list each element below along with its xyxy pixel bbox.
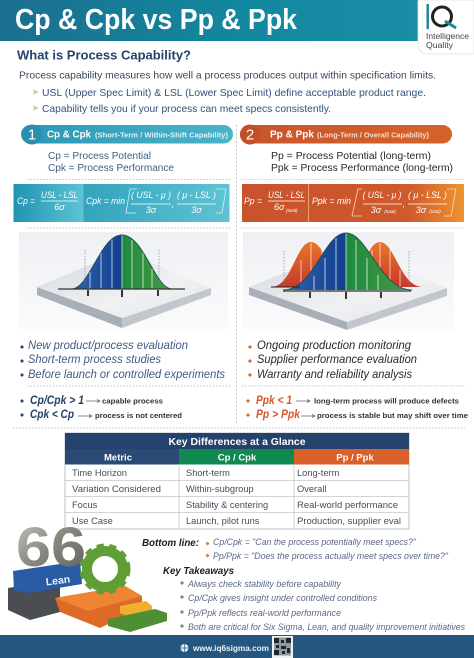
table: key differences: Cp / Cpk	[218, 452, 257, 464]
use cases: Pp and Ppk	[248, 338, 417, 381]
formula bar: Pp and Ppk: 3σ	[371, 205, 382, 215]
panel header 1: Cp & Cpk: Cp & Cpk	[47, 130, 91, 140]
bottom line	[142, 537, 449, 561]
interpretation rules: Cp and Cpk: Cpk < Cp	[30, 409, 74, 421]
table: key differences: Time Horizon	[72, 468, 127, 478]
icon: globe	[180, 644, 188, 652]
heading: What is Process Capability?: What is Process Capability?	[17, 48, 191, 62]
definitions: Cp and Cpk: Cp = Process Potential	[48, 151, 151, 162]
definitions: Pp and Ppk: Ppk = Process Performance (long-term)	[271, 163, 453, 174]
table: key differences: Use Case	[72, 516, 113, 526]
use cases: Cp and Cpk: Before launch or controlled experiments	[28, 367, 225, 381]
illustration: six sigma and lean blocks: Lean	[45, 574, 71, 588]
intro text: Process capability measures how well a process produces output within specification limits.	[19, 70, 436, 82]
illustration: six sigma and lean blocks	[8, 515, 167, 632]
table: key differences: Real-world performance	[297, 500, 398, 510]
formula bar: Pp and Ppk: (total)	[384, 209, 396, 214]
panel header 2: Pp & Ppk	[240, 124, 452, 144]
formula bar: Cp and Cpk: ( μ - LSL )	[177, 190, 216, 200]
formula bar: Cp and Cpk: 3σ	[146, 205, 157, 215]
illustration: six sigma and lean blocks: 66	[16, 515, 86, 578]
interpretation rules: Pp and Ppk: long-term process will produce defects	[314, 396, 459, 406]
table: key differences: Short-term	[186, 468, 230, 478]
interpretation rules: Cp and Cpk: process is not centered	[95, 411, 182, 420]
logo: IQ Intelligence Quality	[418, 0, 474, 54]
panel header 1: Cp & Cpk: (Short-Term / Within-Shift Capability)	[95, 130, 229, 140]
center divider	[236, 125, 238, 425]
formula bar: Pp and Ppk	[242, 184, 464, 222]
table: key differences: Metric	[104, 452, 132, 464]
key takeaways: Both are critical for Six Sigma, Lean, and quality improvement initiatives	[188, 622, 465, 632]
table: key differences: Variation Considered	[72, 484, 161, 494]
formula bar: Pp and Ppk: ( μ - LSL )	[408, 190, 447, 200]
key takeaways: Always check stability before capability	[187, 579, 341, 589]
formula bar: Pp and Ppk: Pp =	[244, 196, 262, 207]
key takeaways: Key Takeaways	[163, 565, 234, 577]
formula bar: Pp and Ppk: 3σ	[416, 205, 427, 215]
definitions: Pp and Ppk: Pp = Process Potential (long-term)	[271, 151, 431, 162]
formula bar: Pp and Ppk: (total)	[429, 209, 441, 214]
table: key differences: Overall	[297, 484, 326, 494]
key takeaways	[163, 565, 465, 632]
formula bar: Cp and Cpk: 3σ	[191, 205, 202, 215]
formula bar: Pp and Ppk: Ppk = min	[312, 196, 351, 207]
table: key differences: Pp / Ppk	[336, 452, 374, 464]
panel header 2: Pp & Ppk: (Long-Term / Overall Capability)	[317, 130, 430, 140]
table: key differences: Stability & centering	[186, 500, 268, 510]
definitions: Cp and Cpk	[48, 151, 174, 174]
intro text: USL (Upper Spec Limit) & LSL (Lower Spec Limit) define acceptable product range.	[42, 88, 426, 99]
table: key differences: Production, supplier eval	[297, 516, 401, 526]
use cases: Cp and Cpk: New product/process evaluation	[28, 338, 188, 352]
QR code	[272, 636, 293, 658]
chart: shifted bell curves on platform	[243, 232, 454, 330]
bottom line: Pp/Ppk = "Does the process actually meet specs over time?"	[213, 551, 449, 561]
formula bar: Cp and Cpk: ,	[172, 199, 174, 209]
interpretation rules: Pp and Ppk: process is stable but may shift over time	[317, 411, 468, 420]
formula bar: Cp and Cpk: 6σ	[54, 202, 65, 212]
formula bar: Pp and Ppk: USL - LSL	[268, 190, 305, 200]
use cases: Pp and Ppk: Warranty and reliability analysis	[257, 367, 412, 381]
use cases: Cp and Cpk: Short-term process studies	[28, 352, 161, 366]
interpretation rules: Pp and Ppk: Ppk < 1	[256, 395, 292, 407]
bottom line: Cp/Cpk = "Can the process potentially meet specs?"	[213, 537, 417, 547]
key takeaways: Cp/Cpk gives insight under controlled conditions	[188, 593, 377, 603]
formula bar: Cp and Cpk: ( USL - μ )	[131, 190, 171, 200]
table: key differences: Within-subgroup	[186, 484, 254, 494]
logo: IQ Intelligence Quality: Quality	[426, 41, 453, 50]
chart: single bell curve on platform	[19, 232, 228, 330]
interpretation rules: Cp and Cpk	[20, 395, 182, 421]
logo: IQ Intelligence Quality: Intelligence	[426, 32, 470, 41]
bottom line: Bottom line:	[142, 538, 199, 549]
title: Cp & Cpk vs Pp & Ppk	[15, 4, 298, 36]
formula bar: Pp and Ppk: ,	[402, 199, 405, 209]
website: www.iq6sigma.com	[192, 644, 269, 653]
intro text: Capability tells you if your process can meet specs consistently.	[42, 104, 331, 115]
table: key differences: Long-term	[297, 468, 340, 478]
table: key differences: Key Differences at a Glance	[168, 437, 306, 448]
interpretation rules: Pp and Ppk	[246, 395, 468, 421]
table: key differences: Launch, pilot runs	[186, 516, 260, 526]
use cases: Cp and Cpk	[20, 338, 225, 381]
table: key differences: Focus	[72, 500, 98, 510]
interpretation rules: Pp and Ppk: Pp > Ppk	[256, 409, 301, 421]
formula bar: Pp and Ppk: ( USL - μ )	[362, 190, 402, 200]
formula bar: Cp and Cpk: Cpk = min	[86, 196, 125, 207]
header banner	[0, 0, 474, 41]
panel header 2: Pp & Ppk: 2	[246, 126, 254, 144]
use cases: Pp and Ppk: Supplier performance evaluation	[257, 352, 417, 366]
formula bar: Pp and Ppk: 6σ	[274, 202, 285, 212]
panel header 1: Cp & Cpk: 1	[28, 126, 36, 144]
use cases: Pp and Ppk: Ongoing production monitoring	[257, 338, 411, 352]
definitions: Pp and Ppk	[271, 151, 453, 174]
formula bar: Cp and Cpk	[14, 184, 230, 222]
formula bar: Pp and Ppk: (total)	[286, 208, 298, 213]
panel header 1: Cp & Cpk	[21, 124, 233, 144]
formula bar: Cp and Cpk: Cp =	[17, 196, 35, 207]
table: key differences	[65, 433, 409, 529]
intro text	[19, 70, 436, 115]
definitions: Cp and Cpk: Cpk = Process Performance	[48, 163, 174, 174]
key takeaways: Pp/Ppk reflects real-world performance	[188, 608, 341, 618]
interpretation rules: Cp and Cpk: Cp/Cpk > 1	[30, 395, 84, 407]
formula bar: Cp and Cpk: USL - LSL	[41, 190, 78, 200]
footer	[0, 635, 474, 658]
interpretation rules: Cp and Cpk: capable process	[102, 396, 163, 406]
panel header 2: Pp & Ppk: Pp & Ppk	[270, 130, 314, 140]
